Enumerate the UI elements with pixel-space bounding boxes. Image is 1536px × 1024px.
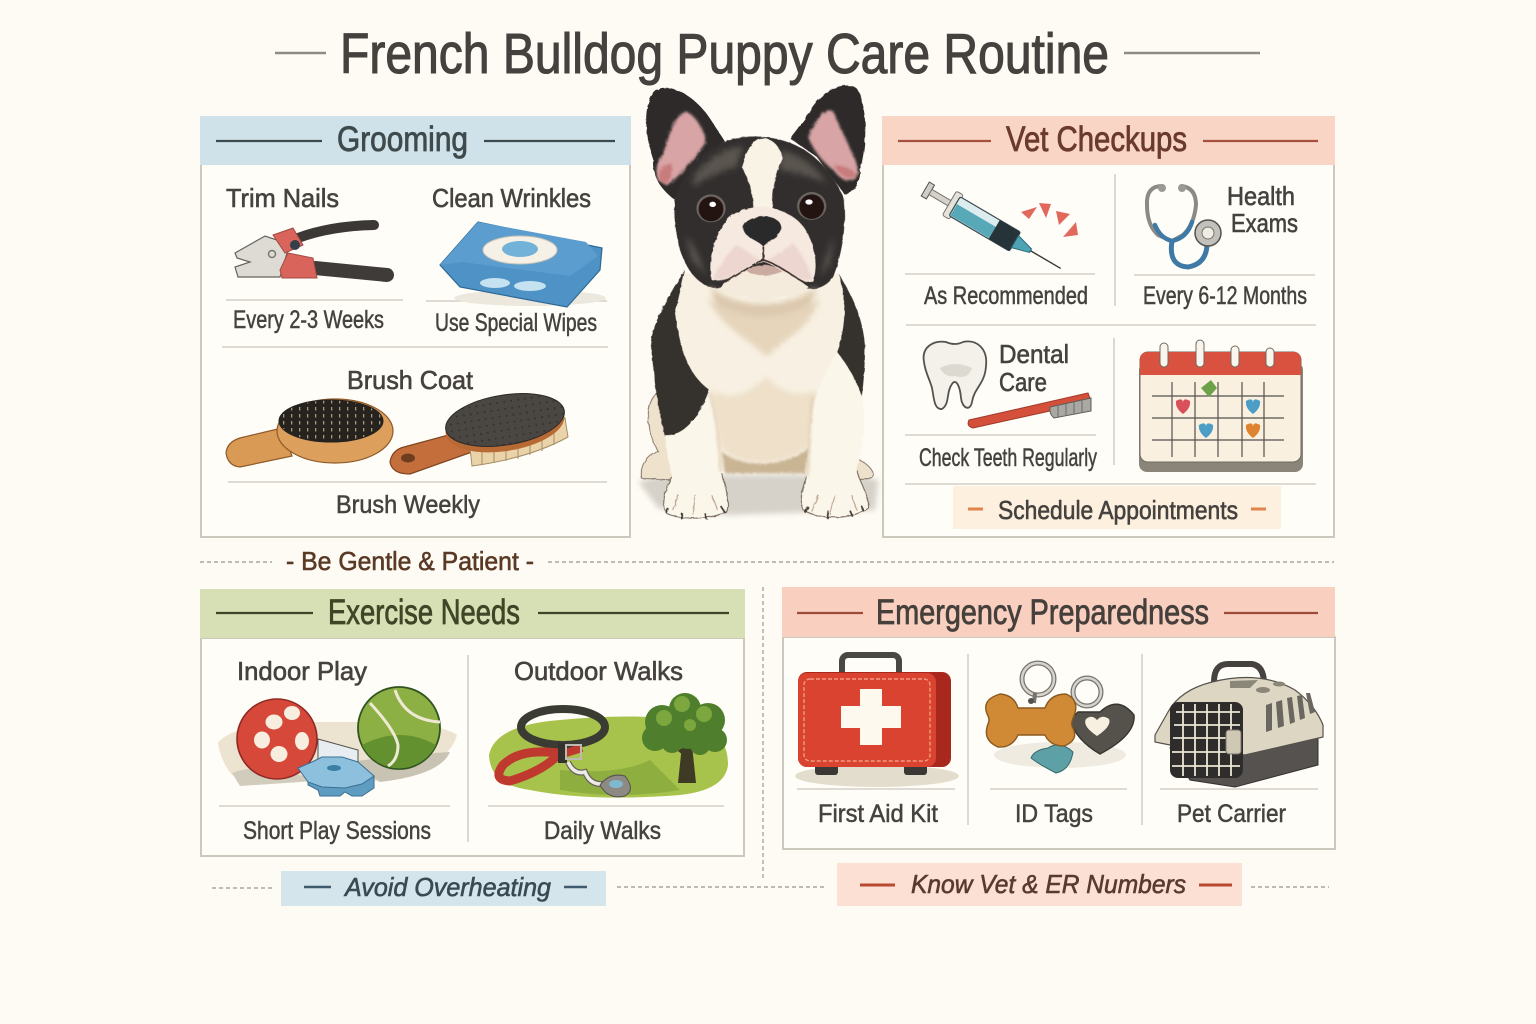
nose (743, 217, 781, 247)
muzzle (710, 207, 816, 282)
text: brush weekly: Brush Weekly (336, 491, 480, 519)
icon: calendar (1139, 340, 1303, 472)
illustration: french bulldog puppy (638, 85, 878, 519)
label: indoor play: Indoor Play (237, 656, 367, 686)
label: pet carrier: Pet Carrier (1177, 800, 1286, 828)
callout: schedule appointments (953, 486, 1281, 529)
forehead tones (687, 147, 833, 277)
heading: grooming: Grooming (337, 120, 468, 159)
heading: emergency preparedness (782, 587, 1335, 637)
neck shadow (710, 287, 817, 317)
label: dental care: Dental (999, 339, 1069, 369)
label: health exams: Health (1227, 181, 1295, 211)
text: short play sessions: Short Play Sessions (243, 817, 431, 845)
text: every 2-3 weeks: Every 2-3 Weeks (233, 306, 384, 334)
heading: exercise needs (200, 589, 745, 638)
text: check teeth regularly: Check Teeth Regularly (919, 444, 1097, 472)
leg shading (709, 393, 813, 477)
body (675, 273, 863, 472)
panel: vet checkups (882, 116, 1335, 537)
label: trim nails: Trim Nails (226, 183, 339, 213)
white blaze (742, 138, 783, 208)
label: health exams: Exams (1231, 208, 1298, 238)
icon: oval bristle brush (226, 399, 393, 467)
chin (718, 267, 808, 301)
icon: toys (218, 687, 457, 796)
heading: vet checkups: Vet Checkups (1006, 120, 1187, 159)
icon: toothbrush (968, 393, 1091, 428)
icon: leash and tree (489, 693, 728, 798)
back paws (641, 393, 873, 480)
text: every 6-12 months: Every 6-12 Months (1143, 282, 1307, 310)
icon: wipes pack (440, 222, 606, 307)
heading: exercise needs: Exercise Needs (328, 593, 520, 632)
label: id tags: ID Tags (1015, 800, 1093, 828)
icon: stethoscope (1147, 184, 1221, 267)
ears (646, 85, 865, 200)
divider: vertical dashed (762, 587, 764, 878)
front legs (664, 352, 869, 518)
mouth (720, 247, 807, 284)
icon: nail clippers (235, 225, 387, 278)
icon: pet carrier (1155, 664, 1323, 787)
toes and claws (664, 470, 869, 519)
icon: syringe (918, 177, 1078, 281)
note: know vet and er numbers: Know Vet & ER Numbers (911, 869, 1186, 899)
label: brush coat: Brush Coat (347, 365, 474, 395)
dark side patches (651, 270, 865, 437)
head (674, 137, 845, 289)
belly shading (710, 377, 817, 463)
heading: emergency preparedness: Emergency Preparedness (876, 593, 1209, 632)
title: French Bulldog Puppy Care Routine (340, 22, 1109, 86)
text: as recommended: As Recommended (924, 282, 1088, 310)
note: know vet and er numbers (837, 863, 1329, 906)
label: clean wrinkles: Clean Wrinkles (432, 183, 591, 213)
callout: schedule appointments: Schedule Appointments (998, 495, 1238, 525)
panel: exercise needs (200, 589, 745, 856)
text: use special wipes: Use Special Wipes (435, 309, 597, 337)
label: first aid kit: First Aid Kit (818, 800, 938, 828)
heading: vet checkups (882, 116, 1335, 165)
label: outdoor walks: Outdoor Walks (514, 656, 683, 686)
note: avoid overheating: Avoid Overheating (343, 872, 552, 902)
icon: tooth (924, 341, 986, 409)
heading: grooming (200, 116, 631, 165)
label: dental care (999, 339, 1069, 397)
icon: wooden brush (390, 386, 568, 474)
eyes (696, 192, 826, 222)
text: daily walks: Daily Walks (544, 817, 661, 845)
ground shadow (638, 475, 878, 515)
note: avoid overheating (212, 871, 824, 906)
label: health exams (1227, 181, 1298, 238)
icon: id tags (986, 663, 1134, 773)
panel: grooming (200, 116, 631, 537)
panel: emergency preparedness (782, 587, 1335, 849)
icon: first aid kit (795, 655, 959, 787)
note: be gentle and patient: - Be Gentle & Patient - (286, 546, 534, 576)
label: dental care: Care (999, 367, 1047, 397)
